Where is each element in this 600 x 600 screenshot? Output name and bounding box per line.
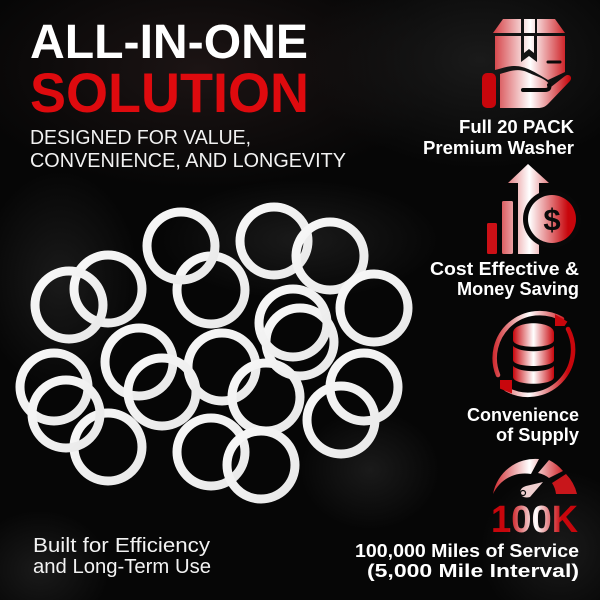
washers — [20, 207, 408, 499]
title — [30, 15, 309, 124]
subtitle: DESIGNED FOR VALUE, — [30, 126, 251, 149]
icon: speedometer — [493, 459, 577, 498]
label: cost effective: Cost Effective & — [430, 259, 579, 279]
label: convenience: Convenience — [467, 405, 579, 425]
tagline: and Long-Term Use — [33, 556, 211, 578]
icon: cost chart with dollar coin — [487, 164, 581, 254]
label: 20 pack: Full 20 PACK — [459, 117, 574, 137]
label: 20 pack — [423, 117, 574, 158]
label: miles of service — [355, 541, 579, 581]
subtitle: CONVENIENCE, AND LONGEVITY — [30, 149, 346, 172]
label: cost effective: Money Saving — [457, 279, 579, 299]
label: convenience — [467, 405, 579, 445]
100K badge: 100K — [491, 499, 579, 541]
label: cost effective — [430, 259, 579, 299]
label: 20 pack: Premium Washer — [423, 138, 574, 158]
label: convenience: of Supply — [496, 425, 579, 445]
tagline — [33, 535, 211, 578]
subtitle — [30, 126, 346, 172]
tagline: Built for Efficiency — [33, 535, 210, 557]
label: miles of service: 100,000 Miles of Service — [355, 541, 579, 561]
icon: cost chart with dollar coin: $ — [543, 202, 561, 237]
title: ALL-IN-ONE — [30, 15, 308, 69]
icon: box on hand — [482, 19, 571, 108]
label: miles of service: (5,000 Mile Interval) — [367, 561, 579, 581]
icon: database with cycle arrows — [495, 313, 573, 395]
title: SOLUTION — [30, 61, 309, 124]
